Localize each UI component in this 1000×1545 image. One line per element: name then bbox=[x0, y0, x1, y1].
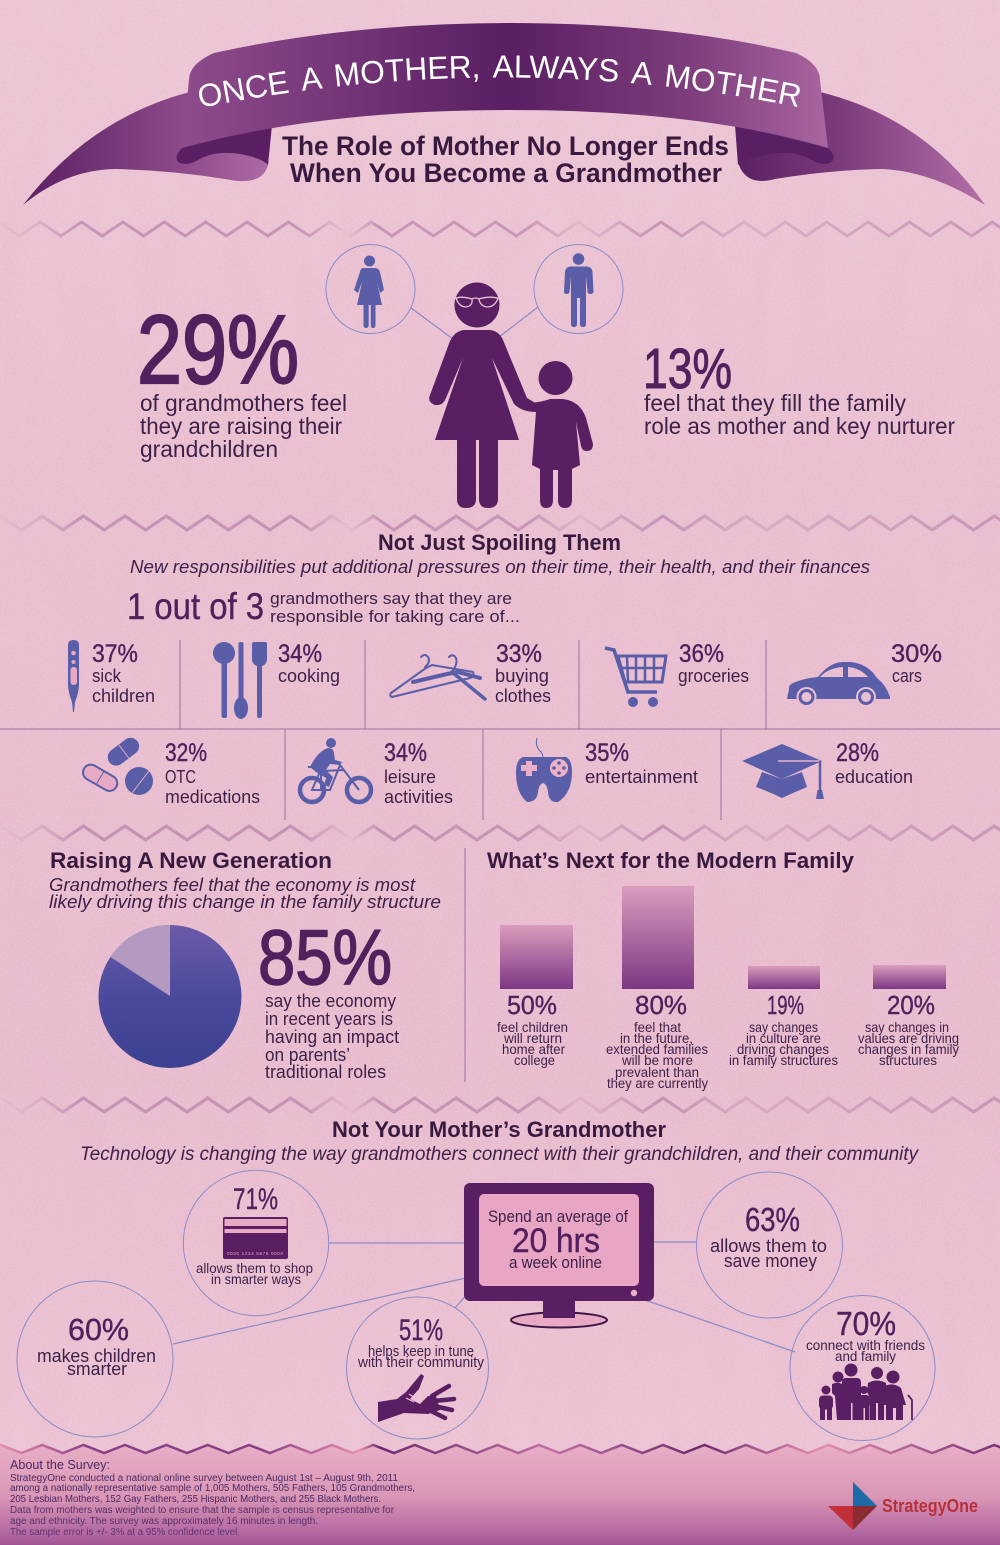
bar label: 80 percent: 80% bbox=[635, 990, 687, 1020]
section: not your mother's grandmother bbox=[17, 1117, 935, 1440]
item: entertainment: 35% bbox=[585, 739, 629, 767]
icon: credit card bbox=[223, 1217, 288, 1259]
item: entertainment bbox=[516, 738, 698, 802]
icon: game controller bbox=[516, 738, 572, 802]
heading: What’s Next for the Modern Family bbox=[487, 848, 855, 873]
bar label: 50 percent: 50% bbox=[507, 990, 557, 1020]
bar chart bbox=[500, 886, 946, 989]
bar label: 80 percent: prevalent than bbox=[615, 1064, 699, 1080]
stat: 85 percent: having an impact bbox=[265, 1027, 399, 1047]
connector lines bbox=[173, 1242, 795, 1352]
bar label: 20 percent: say changes in bbox=[865, 1019, 949, 1035]
bar label: 19 percent: 19% bbox=[767, 990, 804, 1020]
bar label: 50 percent: will return bbox=[503, 1030, 562, 1046]
icon: pills bbox=[80, 734, 153, 795]
footer background bbox=[0, 1445, 1000, 1545]
icon: utensils bbox=[213, 642, 267, 719]
bar label: 19 percent: say changes bbox=[749, 1019, 818, 1035]
item: cooking: 34% bbox=[278, 640, 322, 668]
bar label: 20 percent: changes in family bbox=[858, 1041, 959, 1057]
bar label: 19 percent: in culture are bbox=[746, 1030, 821, 1046]
item: leisure activities bbox=[300, 738, 453, 807]
bar label: 20 percent bbox=[858, 990, 959, 1068]
icon: hangers bbox=[390, 655, 485, 699]
about the survey: StrategyOne conducted a national online survey between August 1st – August 9th, 2011 bbox=[10, 1473, 398, 1484]
item: buying clothes: 33% bbox=[496, 640, 542, 668]
item: education: 28% bbox=[836, 739, 879, 767]
main title: ONCE A MOTHER, ALWAYS A MOTHER bbox=[199, 56, 800, 107]
section divider bbox=[464, 848, 466, 1082]
stat: 13 percent: 13% bbox=[643, 337, 732, 401]
about the survey: Data from mothers was weighted to ensure that the sample is census representative for bbox=[10, 1505, 395, 1516]
one out of three: grandmothers say that they are bbox=[270, 589, 512, 608]
item: buying clothes: buying bbox=[495, 666, 549, 686]
logo: StrategyOne: StrategyOne bbox=[882, 1496, 978, 1516]
pie chart bbox=[98, 925, 242, 1068]
about the survey: 205 Lesbian Mothers, 152 Gay Fathers, 255 Hispanic Mothers, and 255 Black Mothers. bbox=[10, 1494, 381, 1505]
stat: 13 percent bbox=[643, 337, 955, 439]
stat: 85 percent: on parents’ bbox=[265, 1045, 350, 1065]
bar label: 19 percent: in family structures bbox=[729, 1052, 838, 1068]
one out of three: 1 out of 3 bbox=[127, 586, 264, 627]
circle: 71 percent: 71% bbox=[233, 1183, 278, 1216]
section: what's next bbox=[487, 848, 959, 1091]
bar label: 80 percent bbox=[606, 990, 708, 1091]
item: leisure activities: 34% bbox=[384, 739, 427, 767]
section: not just spoiling them bbox=[0, 530, 1000, 820]
circle: 60 percent: 60% bbox=[68, 1312, 129, 1347]
circle: 51 percent: 51% bbox=[399, 1314, 443, 1347]
circle: 71 percent: in smarter ways bbox=[211, 1271, 301, 1287]
stat: 29 percent: they are raising their bbox=[140, 413, 342, 439]
section: raising a new generation bbox=[49, 848, 441, 1082]
stat: 29 percent: 29% bbox=[137, 295, 299, 404]
stat: 29 percent: of grandmothers feel bbox=[140, 390, 347, 416]
circle: 70 percent: 70% bbox=[836, 1305, 896, 1342]
item: buying clothes bbox=[390, 640, 551, 706]
circle: 70 percent: and family bbox=[835, 1348, 896, 1364]
woman in circle bbox=[326, 244, 415, 334]
ribbon main band bbox=[182, 23, 828, 148]
icon: credit card: 0000 1234 5678 0000 bbox=[227, 1251, 283, 1256]
circle: 51 percent: with their community bbox=[357, 1354, 484, 1371]
item: buying clothes: clothes bbox=[495, 686, 551, 706]
item: cars: cars bbox=[892, 666, 922, 686]
circle: 63 percent: 63% bbox=[745, 1201, 800, 1238]
circle: 63 percent: save money bbox=[724, 1251, 817, 1271]
item: education: education bbox=[835, 767, 913, 787]
bar label: 19 percent: driving changes bbox=[737, 1041, 829, 1057]
stat: 85 percent: say the economy bbox=[265, 991, 396, 1011]
item: groceries: 36% bbox=[679, 640, 724, 668]
ribbon banner bbox=[23, 23, 985, 205]
item: cooking bbox=[213, 640, 340, 719]
about the survey bbox=[10, 1457, 415, 1538]
item: leisure activities: leisure bbox=[384, 767, 436, 787]
circle: 63 percent bbox=[696, 1172, 842, 1318]
item: sick children: sick bbox=[92, 666, 122, 686]
bar label: 50 percent: home after bbox=[502, 1041, 565, 1057]
one out of three bbox=[127, 586, 520, 627]
stat: 29 percent bbox=[137, 295, 347, 462]
item: OTC medications: 32% bbox=[165, 739, 207, 767]
item: leisure activities: activities bbox=[384, 787, 453, 807]
subheading: New responsibilities put additional pressures on their time, their health, and their finances bbox=[130, 557, 870, 577]
item: sick children: children bbox=[92, 686, 155, 706]
stat: 85 percent: 85% bbox=[258, 913, 392, 1001]
about the survey: among a nationally representative sample of 1,005 Mothers, 505 Fathers, 105 Grandmothers, bbox=[10, 1483, 415, 1494]
connector lines bbox=[411, 307, 538, 339]
grandmother figure bbox=[429, 282, 537, 508]
item: groceries bbox=[605, 640, 749, 707]
about the survey: The sample error is +/- 3% at a 95% confidence level. bbox=[10, 1527, 240, 1538]
circle: 51 percent bbox=[346, 1297, 488, 1439]
grid lines bbox=[0, 640, 1000, 820]
subheading: Grandmothers feel that the economy is most bbox=[49, 875, 416, 895]
item: sick children bbox=[68, 640, 155, 712]
bar label: 80 percent: will be more bbox=[621, 1052, 693, 1068]
circle: 60 percent bbox=[17, 1281, 173, 1437]
circle: 60 percent: makes children bbox=[37, 1346, 156, 1366]
icon: hands bbox=[378, 1374, 454, 1422]
circle: 60 percent: smarter bbox=[67, 1359, 127, 1379]
stat: 29 percent: grandchildren bbox=[140, 436, 278, 462]
circle: 70 percent bbox=[790, 1296, 935, 1440]
icon: car bbox=[787, 662, 890, 707]
heading: Raising A New Generation bbox=[50, 848, 332, 873]
item: groceries: groceries bbox=[678, 666, 749, 686]
item: entertainment: entertainment bbox=[585, 767, 698, 787]
ribbon left fold bbox=[176, 125, 272, 165]
icon: family bbox=[819, 1364, 912, 1420]
ribbon right tail bbox=[736, 92, 985, 205]
icon: graduation cap bbox=[742, 744, 824, 799]
section: family roles bbox=[137, 244, 955, 508]
subtitle bbox=[282, 131, 729, 188]
about the survey: About the Survey: bbox=[10, 1457, 110, 1472]
subtitle: The Role of Mother No Longer Ends bbox=[282, 131, 729, 161]
monitor: 20 hrs bbox=[512, 1222, 600, 1260]
subheading bbox=[49, 875, 441, 912]
heading: Not Your Mother’s Grandmother bbox=[332, 1117, 666, 1142]
one out of three: responsible for taking care of... bbox=[270, 607, 520, 626]
monitor bbox=[464, 1183, 654, 1328]
circle: 70 percent: connect with friends bbox=[806, 1337, 925, 1353]
glasses bbox=[456, 297, 498, 307]
icon: thermometer bbox=[68, 640, 79, 712]
item: OTC medications: medications bbox=[165, 787, 260, 807]
bar label: 80 percent: they are currently bbox=[607, 1075, 708, 1091]
bar label: 19 percent bbox=[729, 990, 838, 1068]
item: cooking: cooking bbox=[278, 666, 340, 686]
stat: 85 percent bbox=[258, 913, 399, 1082]
heading: Not Just Spoiling Them bbox=[378, 530, 621, 555]
item: cars bbox=[787, 640, 942, 707]
circle: 51 percent: helps keep in tune bbox=[368, 1343, 474, 1360]
item: cars: 30% bbox=[891, 640, 942, 668]
circle: 71 percent bbox=[183, 1170, 329, 1316]
bar label: 80 percent: feel that bbox=[634, 1019, 681, 1035]
monitor: a week online bbox=[509, 1253, 602, 1272]
man in circle bbox=[534, 244, 623, 334]
bar label: 20 percent: 20% bbox=[887, 990, 935, 1020]
stat: 85 percent: in recent years is bbox=[265, 1009, 393, 1029]
stat: 13 percent: feel that they fill the family bbox=[644, 390, 906, 416]
item: sick children: 37% bbox=[92, 640, 138, 668]
bar label: 50 percent: college bbox=[514, 1052, 555, 1068]
item: education bbox=[742, 739, 913, 799]
circle: 71 percent: allows them to shop bbox=[196, 1260, 313, 1276]
child figure bbox=[530, 361, 593, 508]
ribbon left tail bbox=[23, 92, 271, 205]
item: OTC medications: OTC bbox=[165, 767, 196, 787]
item: OTC medications bbox=[80, 734, 260, 807]
icon: shopping cart bbox=[605, 648, 666, 707]
logo: StrategyOne bbox=[828, 1482, 978, 1530]
bar label: 80 percent: in the future, bbox=[620, 1030, 693, 1046]
about the survey: age and ethnicity. The survey was approximately 16 minutes in length. bbox=[10, 1516, 318, 1527]
stat: 13 percent: role as mother and key nurturer bbox=[644, 413, 955, 439]
circle: 63 percent: allows them to bbox=[710, 1236, 827, 1256]
ribbon right fold bbox=[735, 125, 834, 165]
bar label: 20 percent: values are driving bbox=[858, 1030, 959, 1046]
stat: 85 percent: traditional roles bbox=[265, 1062, 386, 1082]
monitor: Spend an average of bbox=[488, 1207, 628, 1226]
subheading: Technology is changing the way grandmothers connect with their grandchildren, and their community bbox=[80, 1144, 919, 1165]
icon: bicycle bbox=[300, 738, 371, 802]
subheading: likely driving this change in the family structure bbox=[49, 892, 441, 912]
bar label: 50 percent bbox=[497, 990, 568, 1068]
subtitle: When You Become a Grandmother bbox=[290, 158, 722, 188]
bar label: 50 percent: feel children bbox=[497, 1019, 568, 1035]
bar label: 80 percent: extended families bbox=[606, 1041, 708, 1057]
bar label: 20 percent: structures bbox=[879, 1052, 937, 1068]
